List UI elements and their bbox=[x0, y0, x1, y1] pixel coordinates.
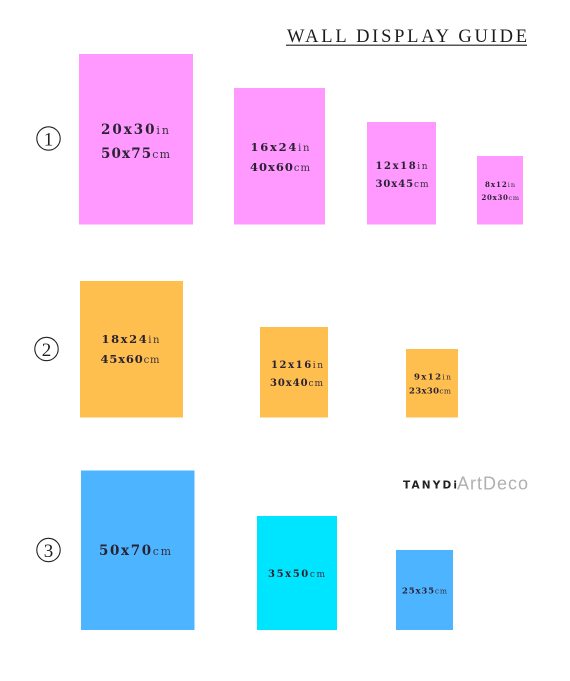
frame 18x24 bbox=[80, 281, 183, 418]
logo bbox=[403, 474, 528, 494]
frame 16x24: 16x24in bbox=[250, 140, 310, 154]
frame 35x50 bbox=[257, 516, 337, 630]
frame 25x35 bbox=[396, 550, 453, 630]
number badge 2: 2 bbox=[42, 340, 51, 361]
logo: TANYDi bbox=[403, 480, 457, 492]
frame 12x16: 12x16in bbox=[271, 360, 323, 371]
panel: row 3 blue sizes bbox=[37, 470, 453, 630]
number badge 1 bbox=[37, 127, 60, 150]
number badge 1: 1 bbox=[44, 130, 53, 150]
frame 9x12 bbox=[406, 349, 458, 418]
frame 12x16: 30x40cm bbox=[270, 378, 323, 389]
frame 25x35: 25x35cm bbox=[402, 586, 447, 596]
frame 20x30: 20x30in bbox=[101, 122, 169, 138]
frame 16x24: 40x60cm bbox=[250, 160, 311, 174]
frame 8x12 bbox=[477, 156, 523, 224]
title: WALL DISPLAY GUIDE bbox=[287, 27, 527, 47]
frame 50x70: 50x70cm bbox=[99, 543, 172, 559]
panel: row 1 pink sizes bbox=[37, 54, 523, 224]
frame 9x12: 9x12in bbox=[414, 372, 451, 382]
number badge 2 bbox=[35, 337, 58, 361]
frame 50x70 bbox=[81, 470, 194, 630]
frame 12x18 bbox=[367, 122, 436, 224]
frame 12x18: 30x45cm bbox=[376, 179, 429, 190]
frame 9x12: 23x30cm bbox=[409, 386, 451, 396]
frame 18x24: 45x60cm bbox=[100, 352, 160, 366]
frame 35x50: 35x50cm bbox=[268, 569, 325, 580]
frame 20x30: 50x75cm bbox=[101, 146, 171, 162]
logo: ArtDeco bbox=[457, 474, 528, 494]
frame 16x24 bbox=[234, 88, 325, 224]
frame 20x30 bbox=[79, 54, 193, 224]
number badge 3 bbox=[37, 538, 60, 562]
frame 8x12: 8x12in bbox=[485, 180, 515, 189]
frame 12x18: 12x18in bbox=[376, 161, 428, 172]
frame 18x24: 18x24in bbox=[102, 332, 160, 346]
frame 8x12: 20x30cm bbox=[482, 193, 519, 202]
frame 12x16 bbox=[260, 327, 328, 418]
panel: row 2 orange sizes bbox=[35, 281, 458, 418]
number badge 3: 3 bbox=[44, 541, 53, 562]
